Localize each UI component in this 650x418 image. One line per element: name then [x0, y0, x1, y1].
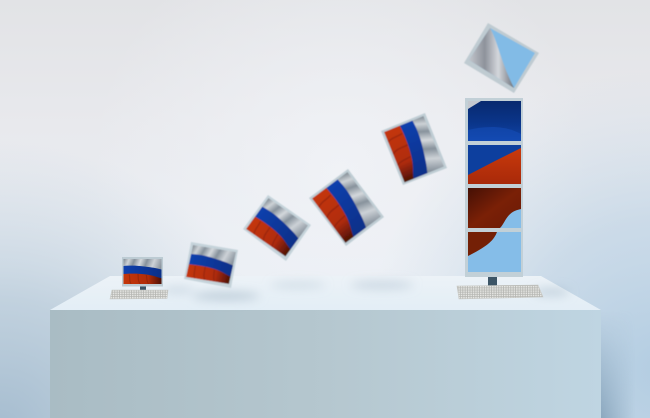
table top surface — [50, 276, 601, 310]
frame — [122, 257, 163, 286]
screen 4: sky with dark red corner — [468, 232, 521, 272]
screen flag — [124, 259, 162, 284]
small desktop computer — [110, 257, 168, 299]
tilted monitor 2 — [184, 242, 238, 288]
table — [50, 276, 601, 418]
stand — [140, 286, 146, 291]
screen 1: blue — [468, 101, 521, 141]
stand — [488, 277, 497, 286]
tilted monitor 5 — [381, 113, 447, 185]
frame — [465, 98, 523, 277]
table front face — [50, 310, 601, 418]
tilted monitor 4 — [309, 169, 384, 246]
screen 2: blue to red — [468, 145, 521, 184]
keyboard — [110, 290, 168, 299]
keyboard — [457, 285, 543, 299]
floating monitor shadows — [162, 281, 570, 300]
top tilted monitor — [464, 23, 539, 93]
screen 3: dark red with sky — [468, 188, 521, 228]
tall monitor stack — [457, 98, 543, 299]
tilted monitor 3 — [243, 195, 311, 261]
